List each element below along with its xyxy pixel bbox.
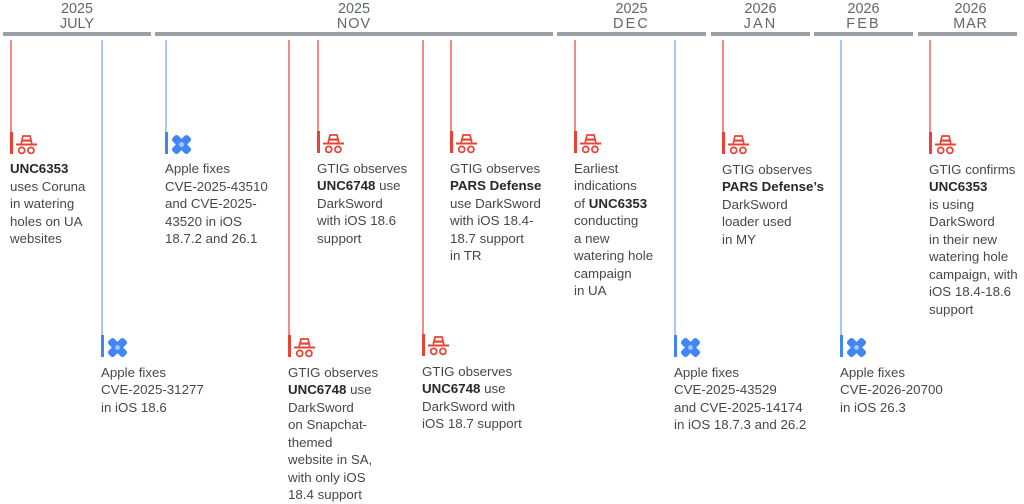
text: in iOS 18.6	[101, 400, 167, 415]
text: with iOS 18.4-	[450, 213, 534, 228]
icon: spy	[728, 135, 749, 154]
icon: spy	[580, 134, 601, 154]
month header: 2026 Jan	[711, 1, 810, 36]
text: DarkSword	[288, 400, 354, 415]
icon: spy	[934, 133, 957, 156]
month header: 2026 Mar	[918, 1, 1017, 36]
month header: 2025 July: 2025	[61, 1, 93, 17]
month header: 2026 Feb: 2026	[847, 1, 880, 17]
text: website in SA,	[288, 452, 372, 467]
text: conducting	[574, 213, 638, 228]
text	[317, 161, 407, 246]
event: UNC6353 uses Coruna	[10, 40, 86, 246]
text	[574, 161, 653, 298]
month header: 2025 Nov	[155, 1, 553, 36]
month header: 2026 Feb: FEB	[846, 16, 881, 32]
text: watering hole	[929, 249, 1008, 264]
icon: spy	[16, 135, 37, 154]
text	[674, 365, 806, 432]
month header: 2026 Feb	[814, 1, 913, 36]
month header: 2025 Nov: 2025	[338, 1, 370, 17]
text	[840, 365, 943, 415]
event: GTIG observes UNC6748 with iOS 18.7	[422, 40, 522, 431]
text: indications	[574, 178, 637, 193]
text	[10, 161, 86, 246]
text: loader used	[722, 214, 792, 229]
text: UNC6748 use	[317, 178, 401, 193]
text: with only iOS	[288, 470, 366, 485]
text: 18.7 support	[450, 231, 524, 246]
text: watering hole	[574, 248, 653, 263]
icon: bandage	[681, 338, 700, 357]
text: and CVE-2025-14174	[674, 400, 803, 415]
text: and CVE-2025-	[165, 196, 257, 211]
text: is using	[929, 197, 974, 212]
text: GTIG observes	[317, 161, 407, 176]
text: GTIG confirms	[929, 162, 1015, 177]
text: 18.4 support	[288, 487, 362, 502]
text: support	[317, 231, 361, 246]
text: DarkSword	[317, 196, 383, 211]
event: Apple fixes CVE-2025-31277	[101, 40, 204, 415]
month header: 2025 Dec	[557, 1, 706, 36]
text	[722, 162, 824, 247]
text: UNC6748 use	[422, 381, 506, 396]
icon: spy	[456, 134, 477, 154]
text: use DarkSword	[450, 196, 541, 211]
text: Apple fixes	[674, 365, 739, 380]
text: GTIG observes	[422, 364, 512, 379]
text: Earliest	[574, 161, 618, 176]
text: PARS Defense	[450, 178, 541, 193]
icon: bandage	[108, 338, 127, 357]
text: with iOS 18.6	[317, 213, 396, 228]
text: in watering	[10, 196, 74, 211]
text	[422, 364, 522, 431]
month header: 2026 Mar: 2026	[954, 1, 986, 17]
text: in TR	[450, 248, 482, 263]
text: DarkSword with	[422, 399, 515, 414]
icon: spy	[428, 336, 449, 356]
event: GTIG confirms UNC6353	[929, 40, 1018, 317]
text: CVE-2025-31277	[101, 382, 204, 397]
month header: 2026 Jan: JAN	[744, 16, 777, 32]
event: GTIG observes UNC6748 on Snapchat site	[288, 40, 378, 502]
text: UNC6748 use	[288, 382, 372, 397]
text: Apple fixes	[165, 161, 230, 176]
text: 18.7.2 and 26.1	[165, 231, 257, 246]
text: CVE-2026-20700	[840, 382, 943, 397]
text	[288, 365, 378, 502]
month header: 2025 Dec: DEC	[613, 16, 650, 32]
text: GTIG observes	[722, 162, 812, 177]
text: in iOS 18.7.3 and 26.2	[674, 417, 806, 432]
text: themed	[288, 435, 332, 450]
text: DarkSword	[722, 197, 788, 212]
text	[101, 365, 204, 415]
event: GTIG observes UNC6748 with iOS 18.6	[317, 40, 407, 246]
icon: spy	[294, 338, 315, 358]
event: Apple fixes CVE-2025-43510	[165, 40, 268, 246]
text: 43520 in iOS	[165, 214, 242, 229]
text: PARS Defense’s	[722, 179, 824, 194]
event: Earliest indications of UNC6353	[574, 40, 653, 298]
text: campaign	[574, 266, 632, 281]
month header: 2025 Nov: NOV	[337, 16, 371, 32]
text: CVE-2025-43529	[674, 382, 777, 397]
text: GTIG observes	[288, 365, 378, 380]
text: in UA	[574, 283, 607, 298]
text: websites	[10, 231, 62, 246]
month header: 2025 July	[3, 1, 151, 36]
text: Apple fixes	[101, 365, 166, 380]
icon: bandage	[172, 135, 191, 154]
icon: bandage	[847, 338, 866, 357]
text: a new	[574, 231, 609, 246]
text: GTIG observes	[450, 161, 540, 176]
text: uses Coruna	[10, 179, 85, 194]
text: iOS 18.7 support	[422, 416, 522, 431]
month header: 2025 July: JULY	[60, 16, 94, 32]
month header: 2026 Jan: 2026	[744, 1, 776, 17]
text: support	[929, 302, 973, 317]
text: in iOS 26.3	[840, 400, 906, 415]
month header: 2026 Mar: MAR	[953, 16, 988, 32]
text: on Snapchat-	[288, 417, 367, 432]
text: in their new	[929, 232, 997, 247]
icon: spy	[323, 134, 344, 154]
text: iOS 18.4-18.6	[929, 284, 1011, 299]
event: Apple fixes CVE-2025-43529	[674, 40, 806, 432]
text: UNC6353	[929, 179, 987, 194]
text: in MY	[722, 232, 756, 247]
text: Apple fixes	[840, 365, 905, 380]
text: DarkSword	[929, 214, 995, 229]
event: GTIG observes PARS Defense	[450, 40, 541, 263]
text	[929, 161, 1018, 318]
text	[450, 161, 541, 263]
text: holes on UA	[10, 214, 82, 229]
event: GTIG observes PARS Defense's loader	[722, 40, 824, 247]
event: Apple fixes CVE-2026-20700	[840, 40, 943, 415]
month header: 2025 Dec: 2025	[615, 1, 648, 17]
text: campaign, with	[929, 267, 1018, 282]
text: of UNC6353	[574, 196, 647, 211]
text	[165, 161, 268, 246]
text: CVE-2025-43510	[165, 179, 268, 194]
text: UNC6353	[10, 161, 68, 176]
